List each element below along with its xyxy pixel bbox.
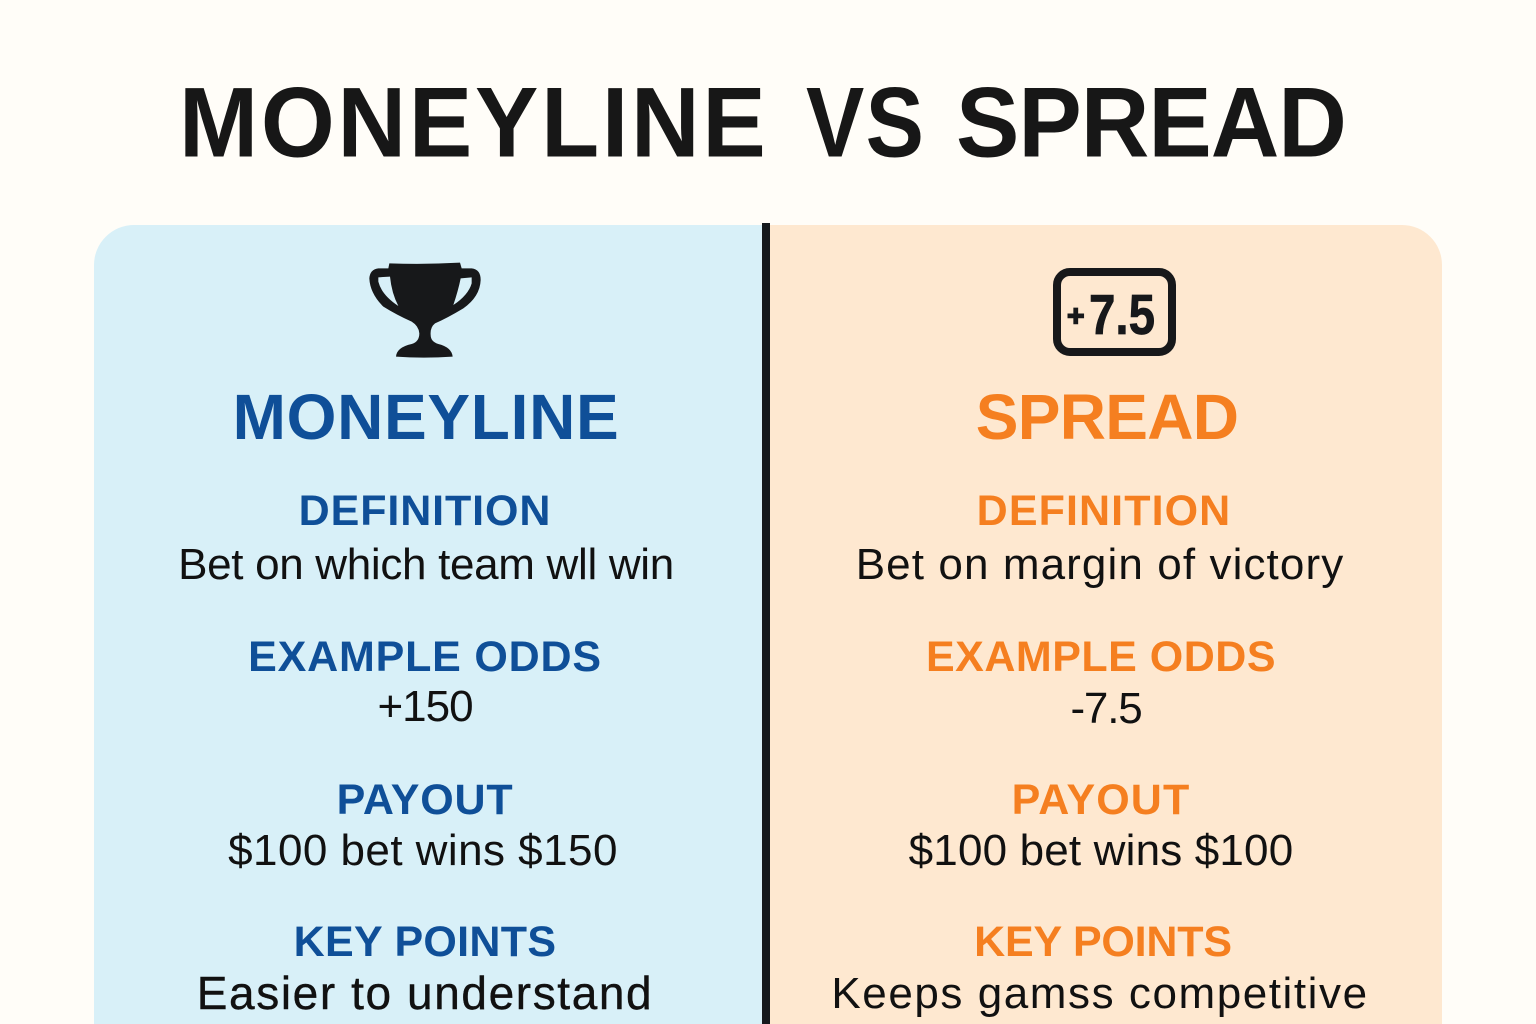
- moneyline payout label: PAYOUT: [337, 776, 513, 824]
- icon: spread badge: [1053, 268, 1176, 356]
- icon: spread badge: +: [1067, 300, 1085, 333]
- title: [179, 67, 1346, 178]
- icon: trophy: [369, 262, 481, 358]
- spread odds label: EXAMPLE ODDS: [926, 633, 1276, 681]
- moneyline definition label: DEFINITION: [299, 487, 551, 535]
- panel: spread: [770, 225, 1442, 1024]
- divider: [762, 223, 770, 1024]
- heading: moneyline: MONEYLINE: [233, 381, 619, 453]
- spread payout label: PAYOUT: [1012, 776, 1190, 824]
- spread key points label: KEY POINTS: [974, 918, 1232, 966]
- panel: moneyline: [94, 225, 762, 1024]
- moneyline odds label: EXAMPLE ODDS: [248, 633, 602, 681]
- moneyline definition text: Bet on which team wll win: [178, 540, 674, 589]
- title: SPREAD: [956, 67, 1346, 178]
- moneyline payout text: $100 bet wins $150: [228, 826, 618, 875]
- title: VS: [806, 67, 925, 178]
- heading: spread: SPREAD: [976, 381, 1238, 453]
- moneyline odds value: +150: [377, 682, 473, 731]
- spread payout text: $100 bet wins $100: [909, 826, 1293, 875]
- moneyline key points label: KEY POINTS: [294, 918, 556, 966]
- moneyline key points text: Easier to understand: [197, 967, 653, 1019]
- spread odds value: -7.5: [1070, 684, 1142, 733]
- spread definition text: Bet on margin of victory: [856, 540, 1344, 589]
- icon: spread badge: 7.5: [1089, 283, 1155, 347]
- spread key points text: Keeps gamss competitive: [831, 969, 1369, 1018]
- title: MONEYLINE: [179, 67, 769, 178]
- spread definition label: DEFINITION: [977, 487, 1231, 535]
